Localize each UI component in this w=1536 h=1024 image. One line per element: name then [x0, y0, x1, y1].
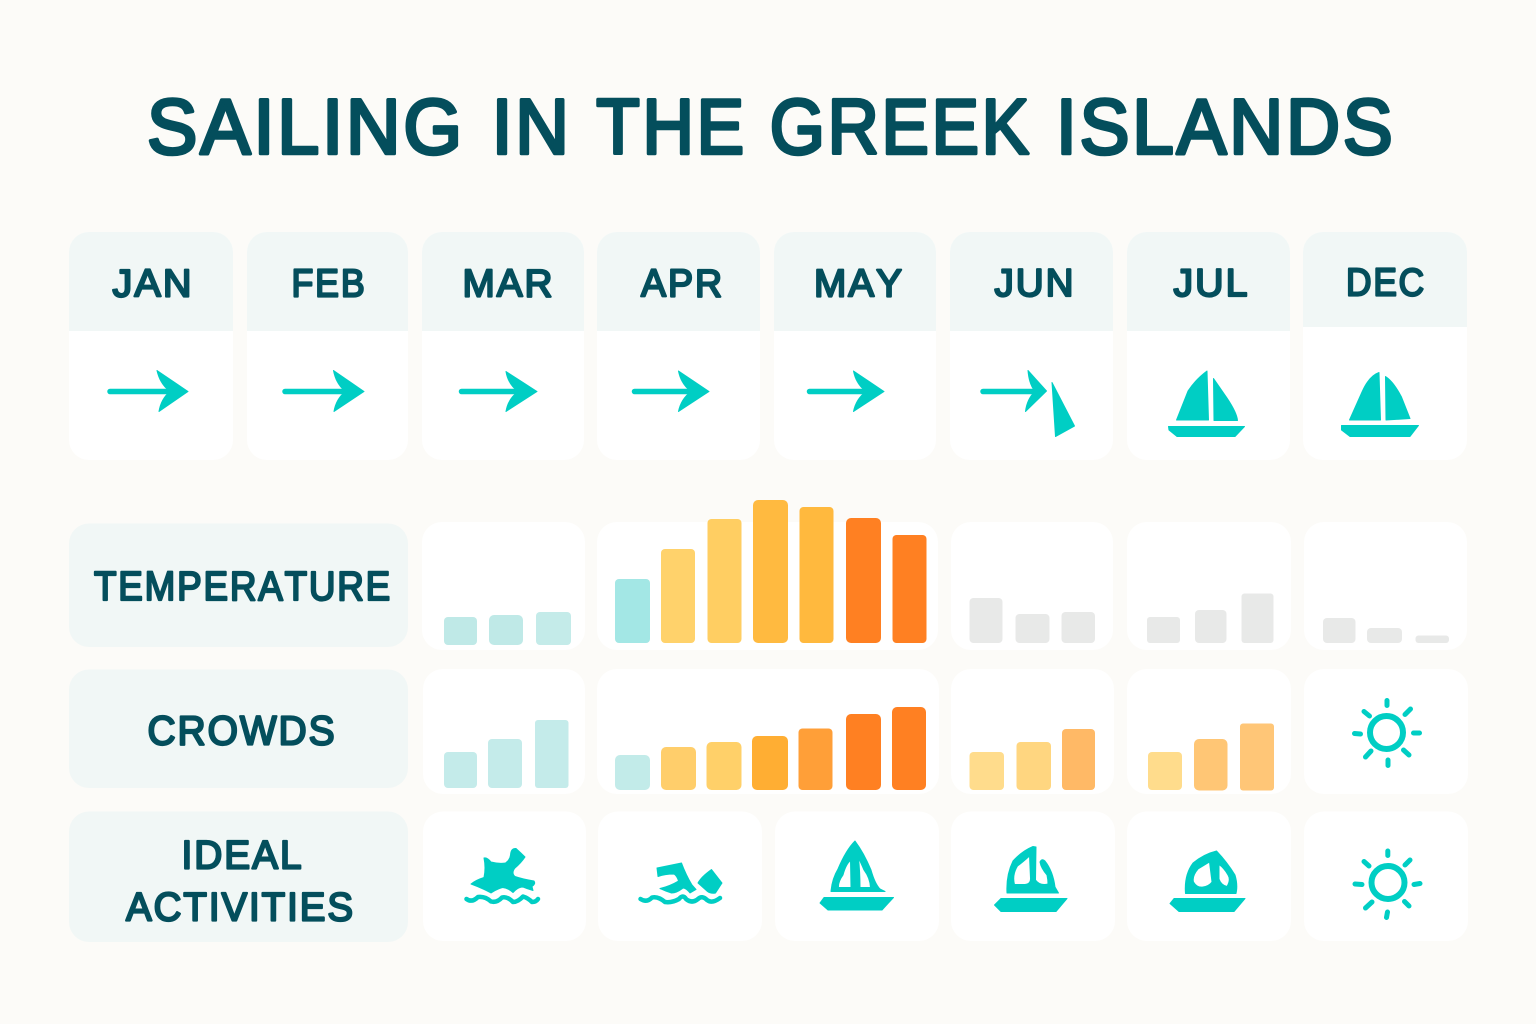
cell: activity swimming — [598, 812, 762, 941]
panel: temperature row — [69, 500, 1467, 650]
icon: swimmer splash with waves — [466, 848, 538, 902]
month card: May: MAY — [814, 263, 904, 306]
bar chart: crowds July cell — [1127, 669, 1291, 794]
row heading: temperature — [69, 524, 408, 647]
title: THE — [596, 83, 747, 171]
cell: crowds December with sun icon — [1304, 669, 1468, 794]
row heading: ideal activities — [69, 812, 408, 942]
month card: June: JUN — [994, 262, 1076, 305]
title — [147, 83, 1396, 171]
bar chart: temperature December cell — [1304, 522, 1467, 650]
icon: outlined sailboat — [820, 841, 894, 910]
cell: activity sailing 1 — [775, 812, 939, 941]
icon: sun — [1355, 851, 1420, 918]
title: SAILING — [147, 83, 465, 171]
month card: March: MAR — [462, 263, 554, 306]
bar chart: temperature July cell — [1127, 522, 1291, 650]
title: IN — [492, 83, 572, 171]
row heading: ideal activities: IDEAL — [182, 833, 304, 877]
row heading: temperature: TEMPERATURE — [94, 563, 392, 609]
bar chart: temperature main cell — [597, 500, 938, 650]
bar chart: temperature June cell — [951, 522, 1113, 650]
row heading: ideal activities: ACTIVITIES — [126, 886, 355, 930]
month card: December — [1303, 232, 1467, 460]
icon: outlined sailboat with rounded sail — [1170, 851, 1245, 912]
month card: April: APR — [641, 263, 724, 306]
month card: July — [1127, 232, 1290, 460]
row heading: crowds: CROWDS — [148, 708, 336, 754]
month card: January — [69, 232, 233, 460]
panel: ideal activities row — [69, 812, 1468, 942]
panel: month cards — [69, 232, 1467, 460]
month card: May — [774, 232, 936, 460]
month card: February — [247, 232, 408, 460]
month card: January: JAN — [112, 263, 194, 306]
cell: activity sailing 2 — [951, 812, 1115, 941]
icon: swimmer with waves — [640, 863, 722, 902]
title: ISLANDS — [1056, 83, 1396, 171]
bar chart: crowds June cell — [951, 669, 1114, 794]
bar chart: temperature cell 1 — [422, 522, 585, 650]
panel: crowds row — [69, 669, 1468, 794]
month card: December: DEC — [1346, 262, 1426, 304]
cell: activity splash — [423, 812, 586, 941]
cell: activity sailing 3 — [1127, 812, 1291, 941]
row heading: crowds — [69, 670, 408, 788]
bar chart: crowds cell 1 — [423, 669, 585, 794]
title: GREEK — [770, 83, 1032, 171]
month card: March — [422, 232, 584, 460]
icon: outlined sailboat with curved sails — [994, 846, 1067, 912]
month card: June — [950, 232, 1113, 460]
cell: activity December with sun icon — [1304, 812, 1468, 941]
month card: April — [597, 232, 760, 460]
bar chart: crowds main cell — [597, 669, 939, 794]
month card: February: FEB — [292, 263, 366, 306]
icon: sun — [1354, 700, 1420, 766]
month card: July: JUL — [1174, 262, 1250, 305]
